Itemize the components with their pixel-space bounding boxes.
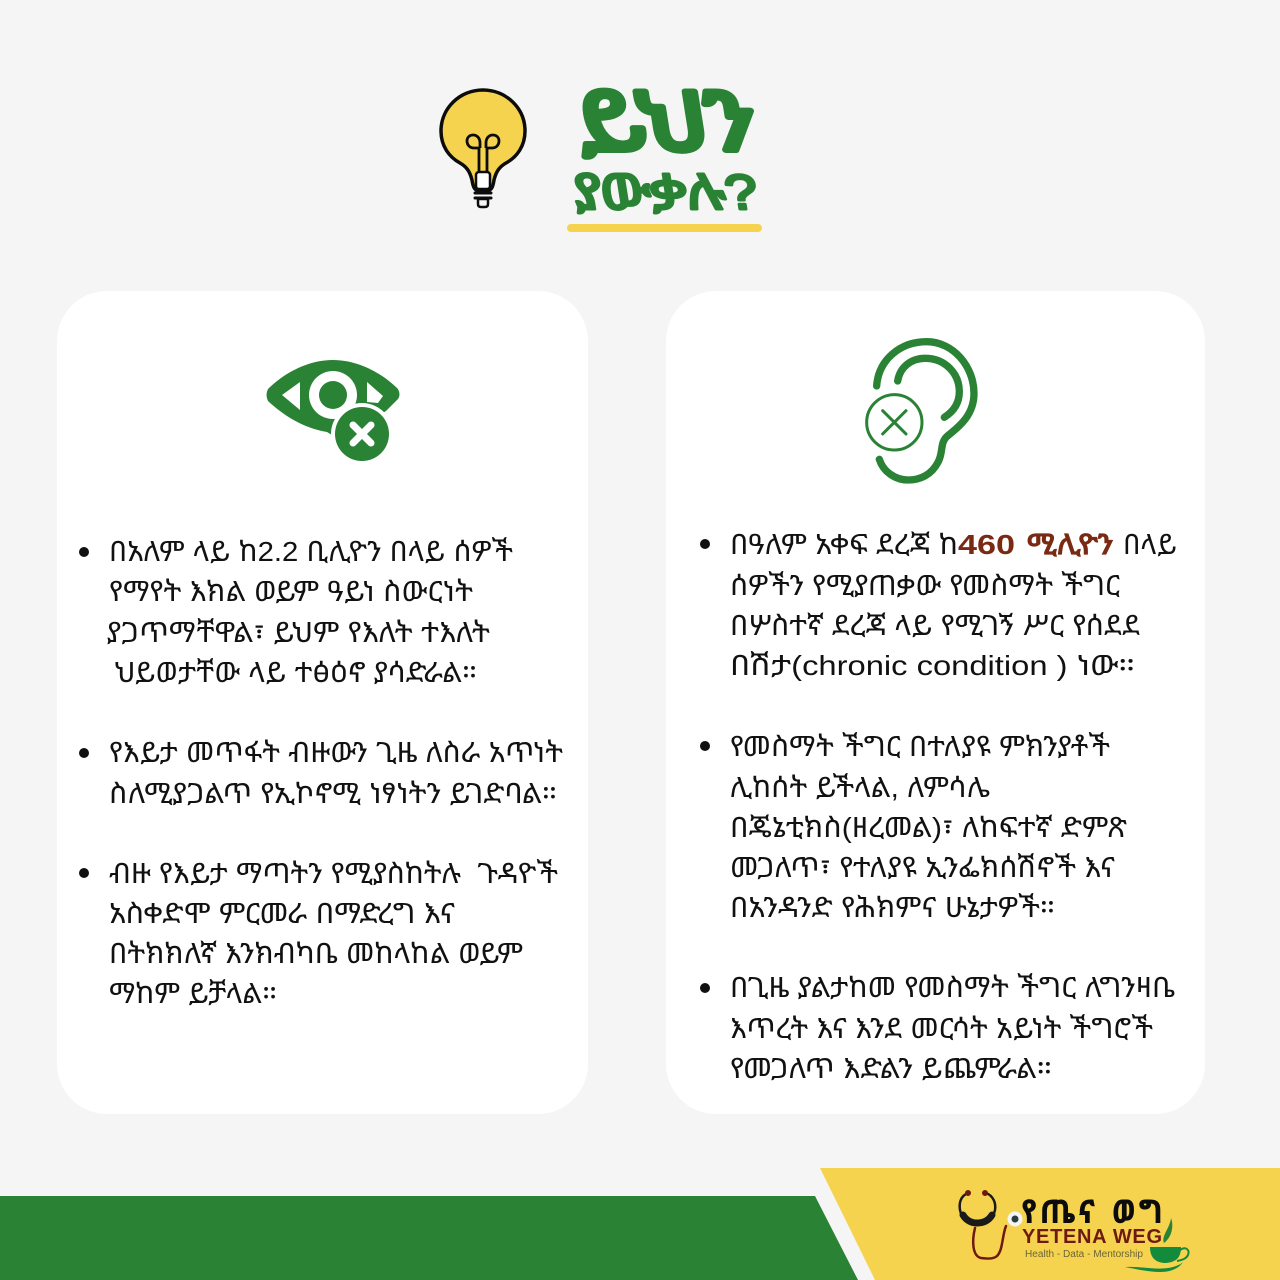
logo Amharic name: የጤና ወግ [1022, 1196, 1162, 1229]
bullet 2: በአንዳንድ የሕክምና ሁኔታዎች። [730, 892, 1055, 923]
bullet 3: በጊዜ ያልታከመ የመስማት ችግር ለግንዛቤ [730, 972, 1175, 1003]
icon: eye with cross [266, 360, 400, 465]
title underline [567, 224, 762, 232]
bullet 2 [700, 731, 1127, 923]
bullet 1: በአለም ላይ ከ2.2 ቢሊዮን በላይ ሰዎች [109, 536, 514, 567]
icon: stethoscope [960, 1190, 1022, 1259]
bullet 2: ሊከሰት ይችላል, ለምሳሌ [730, 772, 990, 803]
bullet 1: 460 [958, 529, 1015, 560]
bullet 1: የማየት እክል ወይም ዓይነ ስውርነት [109, 576, 473, 607]
bullet 2 [79, 737, 563, 809]
bullet 1: ያጋጥማቸዋል፣ ይህም የእለት ተእለት [107, 617, 490, 648]
bullet 1: ሚሊዮን [1027, 529, 1113, 560]
text block: hearing facts [700, 529, 1177, 1084]
panel: hearing [666, 291, 1205, 1114]
bullet 1: በዓለም አቀፍ ደረጃ ከ [730, 529, 958, 560]
bullet 2: የእይታ መጥፋት ብዙውን ጊዜ ለስራ አጥነት [109, 737, 563, 768]
bullet 1: በላይ [1123, 529, 1177, 560]
text block: vision facts [79, 536, 563, 1009]
bullet 3: እጥረት እና እንደ መርሳት አይነት ችግሮች [730, 1013, 1154, 1044]
bullet 2: መጋለጥ፣ የተለያዩ ኢንፌክሰሽኖች እና [730, 852, 1115, 883]
bullet 3: በትክክለኛ እንክብካቤ መከላከል ወይም [109, 938, 523, 969]
logo: Yetena Weg [960, 1190, 1189, 1272]
title: ያውቃሉ? [570, 165, 762, 220]
bullet 2: የመስማት ችግር በተለያዩ ምክንያቶች [730, 731, 1111, 762]
logo Latin name: YETENA WEG [1022, 1226, 1162, 1248]
footer yellow band [820, 1168, 1280, 1280]
bullet 3 [79, 858, 559, 1009]
bullet 3 [700, 972, 1175, 1084]
bullet 1 [700, 529, 1177, 681]
bullet 3: አስቀድሞ ምርመራ በማድረግ እና [109, 898, 455, 929]
logo tagline: Health - Data - Mentorship [1025, 1249, 1143, 1260]
icon: tea cup [1125, 1218, 1189, 1272]
title: ይህን [569, 76, 762, 168]
bullet 1: ሰዎችን የሚያጠቃው የመስማት ችግር [730, 570, 1120, 601]
bullet 1: በሦስተኛ ደረጃ ላይ የሚገኝ ሥር የሰደደ [730, 610, 1140, 641]
footer green band [0, 1196, 858, 1280]
icon: light bulb [441, 90, 525, 207]
bullet 3: የመጋለጥ እድልን ይጨምራል። [730, 1053, 1052, 1084]
title [569, 76, 762, 220]
panel: vision [57, 291, 588, 1114]
bullet 1: ህይወታቸው ላይ ተፅዕኖ ያሳድራል። [114, 657, 477, 688]
bullet 1: በሽታ(chronic condition ) ነው። [730, 650, 1135, 681]
bullet 2: በጄኔቲክስ(ዘረመል)፣ ለከፍተኛ ድምጽ [730, 812, 1127, 843]
bullet 3: ማከም ይቻላል። [109, 978, 277, 1009]
icon: ear with cross [867, 342, 974, 480]
bullet 1 [79, 536, 514, 688]
bullet 2: ስለሚያጋልጥ የኢኮኖሚ ነፃነትን ይገድባል። [109, 778, 557, 809]
bullet 3: ብዙ የእይታ ማጣትን የሚያስከትሉ ጉዳዮች [109, 858, 559, 889]
